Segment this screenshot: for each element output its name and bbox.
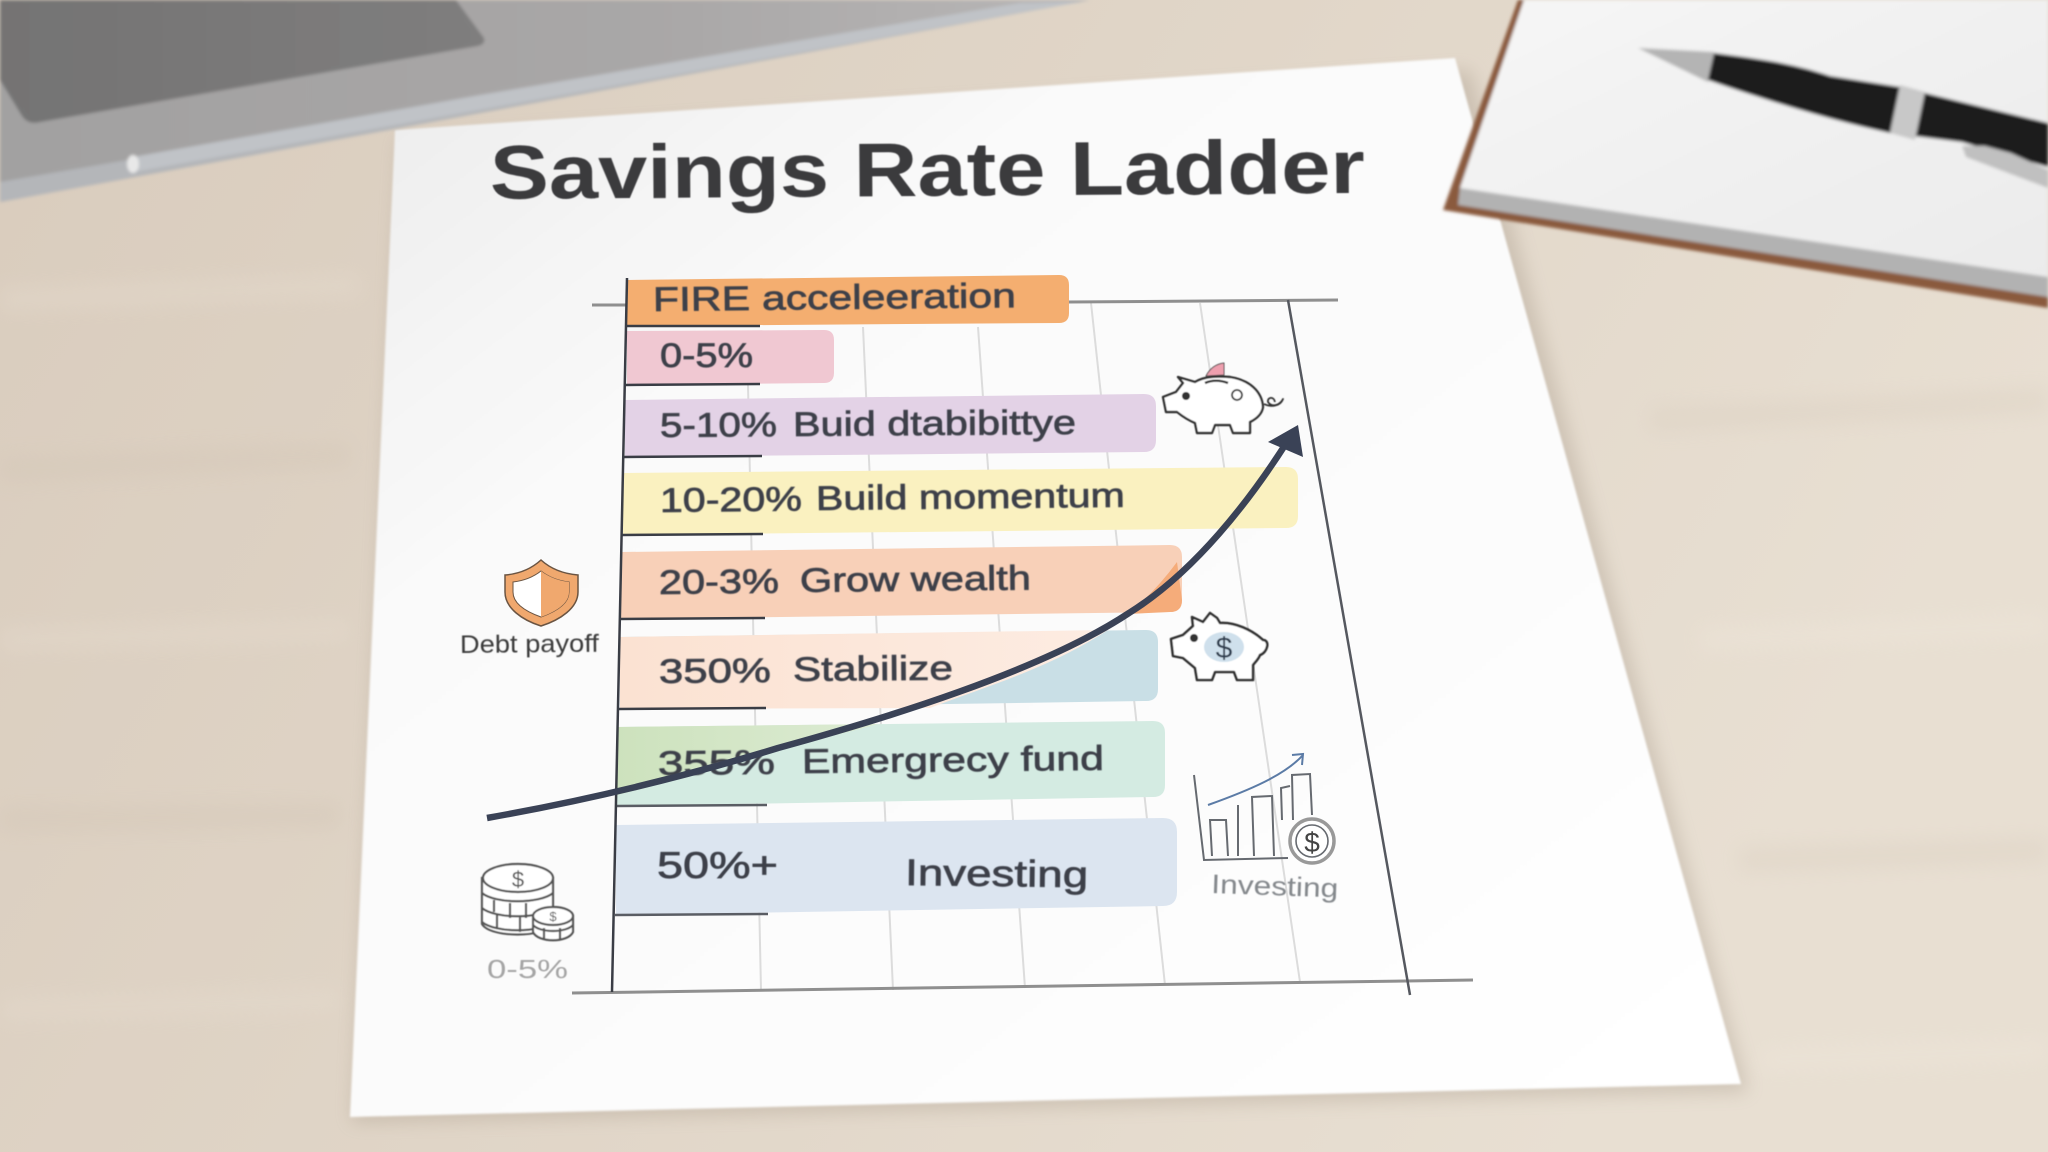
bar: 20-30%: 20-3% bbox=[659, 563, 779, 602]
bar: 355% bbox=[617, 721, 1165, 806]
bar: 355%: 355% bbox=[658, 744, 775, 783]
title: Savings Rate Ladder bbox=[490, 125, 1365, 216]
paper sheet bbox=[350, 58, 1748, 1122]
bar: 20-30% bbox=[621, 545, 1182, 619]
bar: 350% bbox=[620, 630, 1158, 709]
icon: shield bbox=[505, 560, 578, 626]
bar: 50%+ bbox=[616, 818, 1177, 915]
icon: coin stacks: $ bbox=[512, 867, 524, 892]
label: Debt payoff: Debt payoff bbox=[460, 630, 599, 659]
bar: 10-20% bbox=[623, 467, 1298, 535]
notebook and pen bbox=[1443, 0, 2048, 308]
ladder chart bbox=[487, 275, 1473, 995]
bar: 355%: Emergrecy fund bbox=[802, 740, 1104, 781]
bar: 50%+: 50%+ bbox=[657, 845, 778, 886]
icon: coin stacks: $ bbox=[549, 909, 557, 924]
label: 0-5%: 0-5% bbox=[487, 954, 568, 984]
bar: 5-10%: 5-10% bbox=[660, 406, 777, 445]
bar: 20-30%: Grow wealth bbox=[800, 560, 1031, 600]
pen bbox=[1638, 48, 2048, 188]
icon: coin stacks bbox=[482, 864, 573, 940]
bar: 50%+: Investing bbox=[905, 852, 1088, 895]
bar: FIRE acceleration bbox=[627, 275, 1069, 326]
label: Investing: Investing bbox=[1211, 869, 1339, 903]
bar: FIRE acceleration: FIRE acceleeration bbox=[653, 277, 1016, 319]
icon: piggy bank with dollar bbox=[1171, 613, 1267, 680]
bar: 350%: 350% bbox=[659, 652, 771, 691]
bar: 350%: Stabilize bbox=[793, 650, 953, 689]
bar: 0-5%: 0-5% bbox=[660, 337, 753, 375]
bar: 10-20%: 10-20% bbox=[660, 481, 802, 520]
icon: piggy bank with pink coin bbox=[1163, 363, 1283, 433]
bar: 0-5% bbox=[627, 330, 834, 385]
icon: piggy bank with dollar: $ bbox=[1216, 632, 1233, 665]
bar: 10-20%: Build momentum bbox=[816, 477, 1125, 518]
growth arrow bbox=[487, 425, 1303, 818]
icon: bar chart with coin: $ bbox=[1304, 827, 1320, 858]
bar: 5-10%: Buid dtabibittye bbox=[793, 404, 1076, 444]
icon: bar chart with coin bbox=[1194, 754, 1334, 863]
laptop bbox=[0, 0, 1090, 202]
bar: 5-10% bbox=[625, 394, 1156, 457]
